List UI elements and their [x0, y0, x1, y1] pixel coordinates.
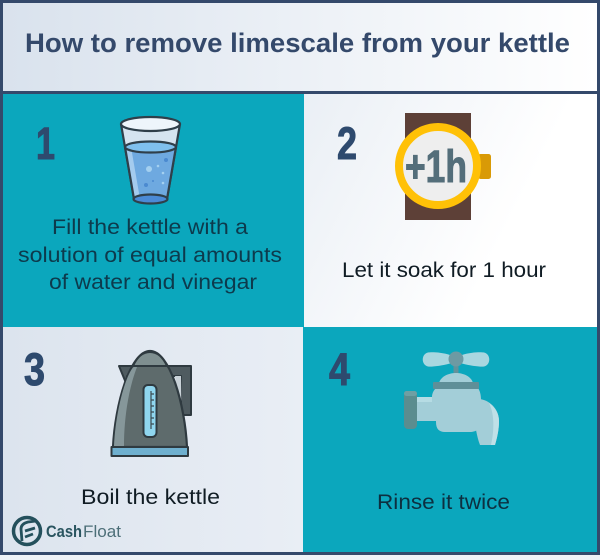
panel: step 3: [3, 327, 303, 552]
step number 3: 3: [24, 344, 45, 395]
text: step 1 instruction: of water and vinegar: [49, 270, 257, 294]
step number 2: 2: [337, 118, 357, 169]
panel: step 2: [304, 94, 597, 327]
icon: watch with +1h: +1h: [405, 141, 467, 192]
text: step 3 instruction: Boil the kettle: [81, 485, 220, 509]
step number 1: 1: [36, 118, 55, 169]
text: step 1 instruction: Fill the kettle with a: [52, 215, 248, 239]
icon: kettle: [112, 351, 191, 456]
icon: glass of water: [121, 117, 180, 204]
panel: step 4: [303, 327, 597, 552]
text: step 1 instruction: solution of equal amounts: [18, 243, 282, 267]
logo: CashFloat: [14, 518, 121, 544]
logo: CashFloat: Cash: [46, 522, 82, 541]
logo: CashFloat: Float: [83, 522, 121, 541]
title: How to remove limescale from your kettle: [25, 28, 570, 58]
icon: water tap: [404, 352, 499, 445]
step number 4: 4: [329, 344, 350, 395]
icon: watch with +1h: [399, 113, 491, 220]
panel: step 1: [3, 94, 304, 327]
text: step 2 instruction: Let it soak for 1 hour: [342, 258, 546, 282]
text: step 4 instruction: Rinse it twice: [377, 490, 510, 514]
text: step 1 instruction: [18, 215, 282, 294]
panel: header: [3, 3, 597, 91]
